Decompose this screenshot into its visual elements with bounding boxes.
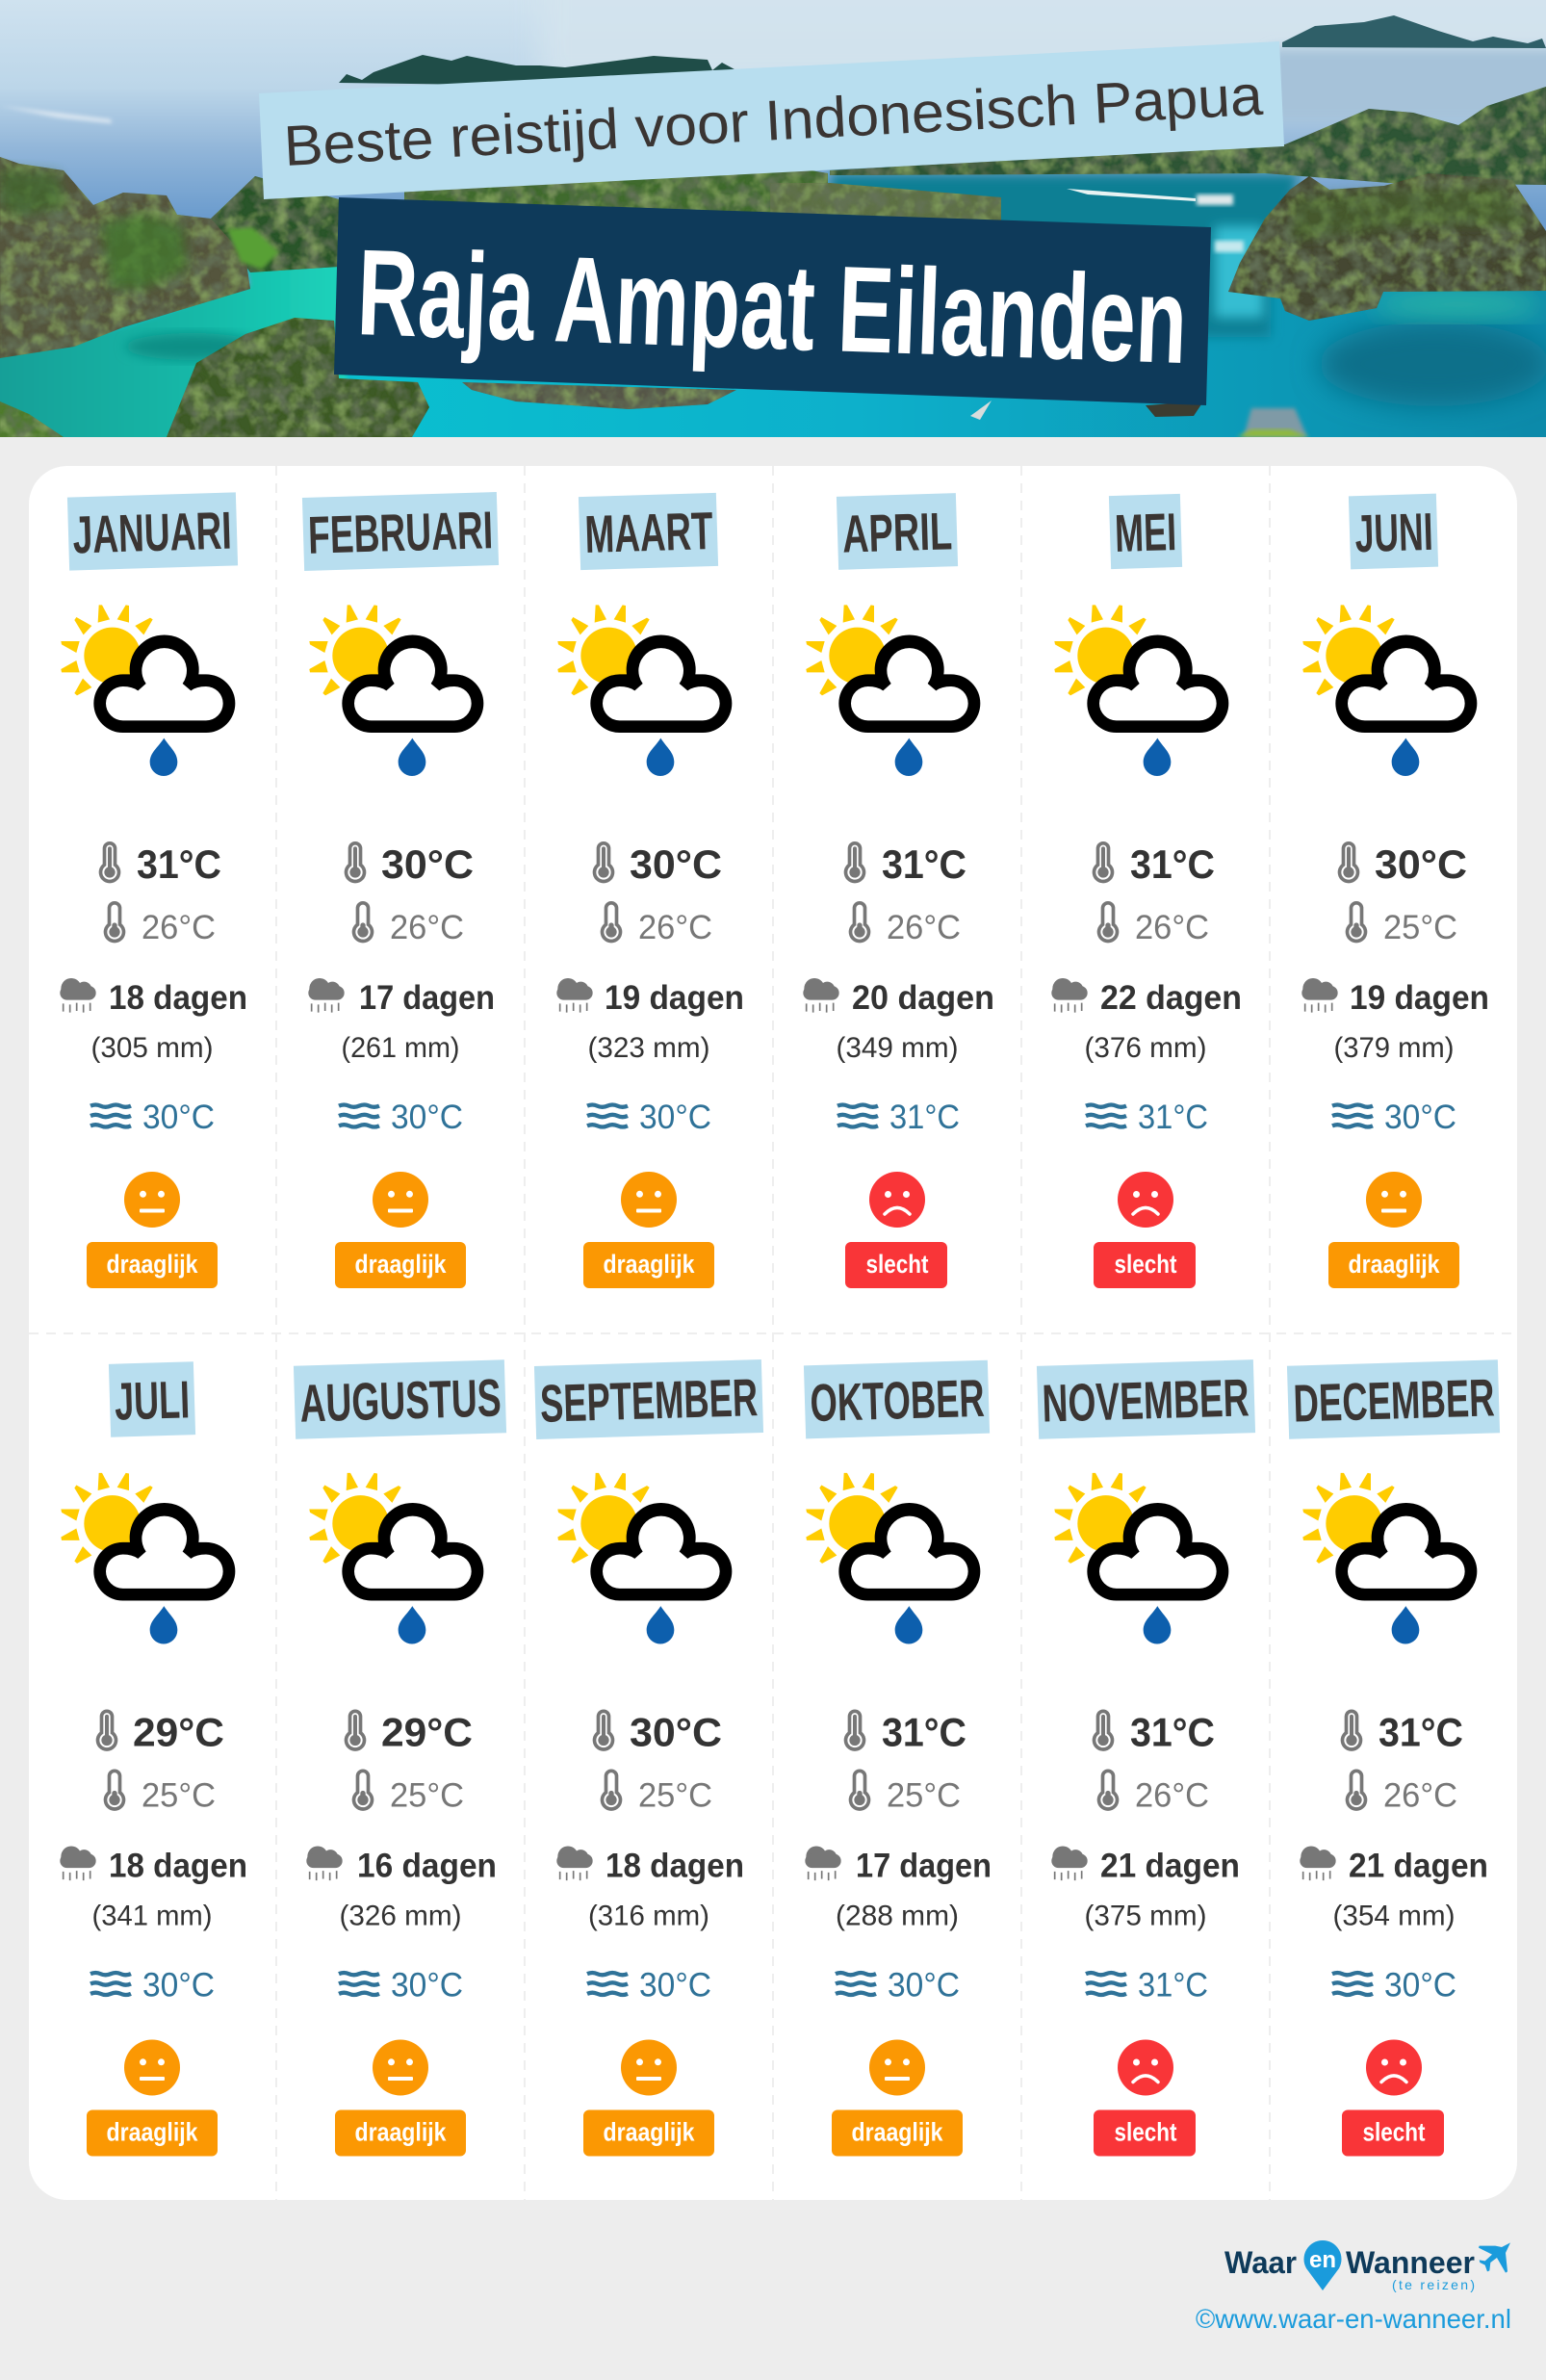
rainfall: (376 mm) [1084,1032,1207,1064]
month: mei [1051,494,1242,1288]
water temperature: 31°C [1138,1966,1208,2005]
rain days [306,1846,497,1885]
website credit: ©www.waar-en-wanneer.nl [1196,2304,1511,2334]
heading: MAART [584,501,713,564]
max temperature: 29°C [133,1710,224,1754]
rating [583,1172,714,1288]
min temperature: 25°C [142,1777,216,1814]
heading: SEPTEMBER [539,1367,759,1434]
water temperature [1086,1099,1208,1136]
heading: APRIL [841,501,953,564]
rating [1328,1172,1459,1288]
water temperature: 30°C [1384,1966,1456,2005]
heading [837,493,958,570]
icon: sun, cloud and rain drop [806,1473,980,1643]
title banner [334,197,1211,405]
logo: Waar en Wanneer: Wanneer [1346,2245,1475,2280]
min temperature: 26°C [1383,1777,1457,1814]
water temperature [90,1966,215,2005]
icon: sun, cloud and rain drop [61,605,235,776]
rating [335,1172,466,1288]
min temperature: 26°C [142,909,216,946]
max temperature [593,1709,722,1754]
max temperature: 31°C [1130,841,1215,887]
rainfall: (323 mm) [587,1032,710,1064]
rainfall: (379 mm) [1334,1032,1454,1064]
min temperature [1097,901,1209,946]
water temperature [587,1099,711,1136]
rating: slecht [1363,2118,1425,2147]
icon: sun, cloud and rain drop [1054,1473,1228,1643]
max temperature: 31°C [882,841,966,887]
water temperature: 30°C [142,1099,215,1136]
min temperature: 25°C [1383,909,1457,946]
rating [583,2039,714,2157]
max temperature: 30°C [381,841,474,887]
month: juni [1301,494,1489,1288]
rainfall: (349 mm) [836,1032,959,1064]
min temperature: 25°C [390,1777,464,1814]
water temperature: 31°C [1138,1099,1208,1136]
month: januari [60,492,247,1288]
heading [67,492,238,571]
min temperature: 25°C [638,1777,712,1814]
water temperature: 30°C [391,1966,463,2005]
max temperature: 31°C [137,841,221,887]
rain days [308,978,495,1017]
rating: draaglijk [603,1250,695,1279]
max temperature [844,841,966,887]
month: november [1037,1359,1255,2157]
month: september [534,1359,763,2157]
min temperature [1346,1769,1457,1814]
heading: JULI [114,1369,191,1432]
rating [1094,1172,1196,1288]
icon: sun, cloud and rain drop [61,1473,235,1643]
rating [832,2039,963,2157]
rainfall: (354 mm) [1332,1901,1456,1931]
rating: draaglijk [106,2118,198,2147]
rating [1342,2039,1444,2157]
water temperature [1332,1099,1456,1136]
rain days [1051,1846,1240,1885]
header photo: tropical islands [0,0,1546,453]
icon: sun, cloud and rain drop [557,605,732,776]
heading: OKTOBER [810,1368,985,1433]
rain days: 19 dagen [1350,979,1489,1017]
rainfall: (341 mm) [92,1901,212,1931]
rating [845,1172,947,1288]
heading: NOVEMBER [1042,1367,1250,1434]
water temperature [837,1099,960,1136]
max temperature [99,841,221,887]
rain days: 18 dagen [109,979,247,1017]
rating [1094,2039,1196,2157]
rainfall: (326 mm) [339,1901,462,1931]
water temperature: 30°C [639,1099,711,1136]
min temperature [104,901,216,946]
rating: draaglijk [354,1250,447,1279]
logo: Waar en Wanneer [1224,2240,1510,2292]
water temperature: 30°C [1384,1099,1456,1136]
rainfall: (316 mm) [588,1901,709,1931]
rain days: 21 dagen [1100,1847,1240,1885]
water temperature: 30°C [391,1099,463,1136]
water temperature [1332,1966,1456,2005]
rain days: 16 dagen [357,1847,497,1885]
min temperature [1346,901,1457,946]
month: februari [302,492,499,1288]
rating: draaglijk [106,1250,198,1279]
rating: draaglijk [354,2118,447,2147]
month: augustus [294,1359,506,2157]
min temperature [352,901,464,946]
rating [87,2039,218,2157]
max temperature [1338,841,1467,887]
rain days: 19 dagen [605,979,744,1017]
rain days: 20 dagen [852,979,994,1017]
rating: draaglijk [603,2118,695,2147]
panel: climate card [29,466,1517,2200]
min temperature [849,901,961,946]
min temperature [849,1769,961,1814]
heading [534,1359,763,1439]
max temperature [844,1709,966,1754]
month: juli [60,1361,247,2157]
rain days: 17 dagen [359,979,495,1017]
max temperature: 31°C [1130,1710,1215,1754]
heading [804,1360,990,1438]
heading: JANUARI [72,501,232,564]
min temperature: 26°C [887,909,961,946]
water temperature [90,1099,215,1136]
max temperature: 30°C [1375,841,1467,887]
water temperature [339,1966,463,2005]
heading: MEI [1114,502,1177,563]
water temperature [836,1966,960,2005]
icon: sun, cloud and rain drop [1054,605,1228,776]
max temperature: 30°C [630,1710,722,1754]
rating [335,2039,466,2157]
min temperature [104,1769,216,1814]
heading: AUGUSTUS [299,1367,502,1434]
icon: sun, cloud and rain drop [1302,1473,1477,1643]
rainfall: (261 mm) [341,1032,460,1064]
min temperature: 26°C [390,909,464,946]
heading: FEBRUARI [307,500,494,565]
min temperature: 26°C [1135,1777,1209,1814]
min temperature [352,1769,464,1814]
rain days [60,978,247,1017]
heading [294,1359,506,1439]
rain days: 18 dagen [606,1847,744,1885]
max temperature: 29°C [381,1710,473,1754]
heading [302,492,499,571]
rain days [805,1846,992,1885]
max temperature [1093,841,1215,887]
title banner: Raja Ampat Eilanden [355,223,1189,389]
water temperature: 31°C [889,1099,960,1136]
min temperature [1097,1769,1209,1814]
subtitle banner: Beste reistijd voor Indonesisch Papua [282,64,1264,178]
logo: Waar en Wanneer: en [1309,2247,1336,2273]
heading [109,1361,195,1437]
rain days [556,1846,744,1885]
rainfall: (288 mm) [836,1901,959,1931]
icon: sun, cloud and rain drop [806,605,980,776]
rain days: 22 dagen [1100,979,1242,1017]
month: maart [556,493,744,1288]
water temperature: 30°C [142,1966,215,2005]
water temperature: 30°C [639,1966,711,2005]
rainfall: (305 mm) [90,1032,214,1064]
icon: sun, cloud and rain drop [309,605,483,776]
rain days: 21 dagen [1349,1847,1488,1885]
min temperature [601,901,712,946]
icon: sun, cloud and rain drop [557,1473,732,1643]
rating: slecht [1115,1250,1176,1279]
rating: slecht [866,1250,928,1279]
water temperature [1086,1966,1208,2005]
month: april [803,493,994,1288]
logo: Waar en Wanneer: Waar [1224,2245,1297,2280]
rating [87,1172,218,1288]
rain days [60,1846,247,1885]
rating: draaglijk [1348,1250,1440,1279]
rain days: 18 dagen [109,1847,247,1885]
max temperature: 31°C [882,1710,966,1754]
heading [1349,494,1438,569]
max temperature [345,841,474,887]
logo: Waar en Wanneer: (te reizen) [1392,2277,1475,2292]
month: oktober [804,1360,992,2157]
icon: sun, cloud and rain drop [309,1473,483,1643]
max temperature [1093,1709,1215,1754]
heading [1109,494,1182,569]
water temperature [339,1099,463,1136]
rainfall: (375 mm) [1084,1901,1207,1931]
rating: draaglijk [851,2118,943,2147]
icon: sun, cloud and rain drop [1302,605,1477,776]
rain days [1300,1846,1488,1885]
max temperature: 31°C [1379,1710,1463,1754]
water temperature: 30°C [888,1966,960,2005]
max temperature [1341,1709,1463,1754]
month: december [1287,1359,1500,2157]
heading [579,493,718,570]
max temperature [593,841,722,887]
subtitle banner [259,41,1284,199]
min temperature: 26°C [1135,909,1209,946]
min temperature [601,1769,712,1814]
heading [1037,1359,1255,1439]
min temperature: 26°C [638,909,712,946]
heading: JUNI [1354,502,1433,563]
water temperature [587,1966,711,2005]
max temperature: 30°C [630,841,722,887]
min temperature: 25°C [887,1777,961,1814]
rating: slecht [1115,2118,1176,2147]
rain days: 17 dagen [856,1847,992,1885]
